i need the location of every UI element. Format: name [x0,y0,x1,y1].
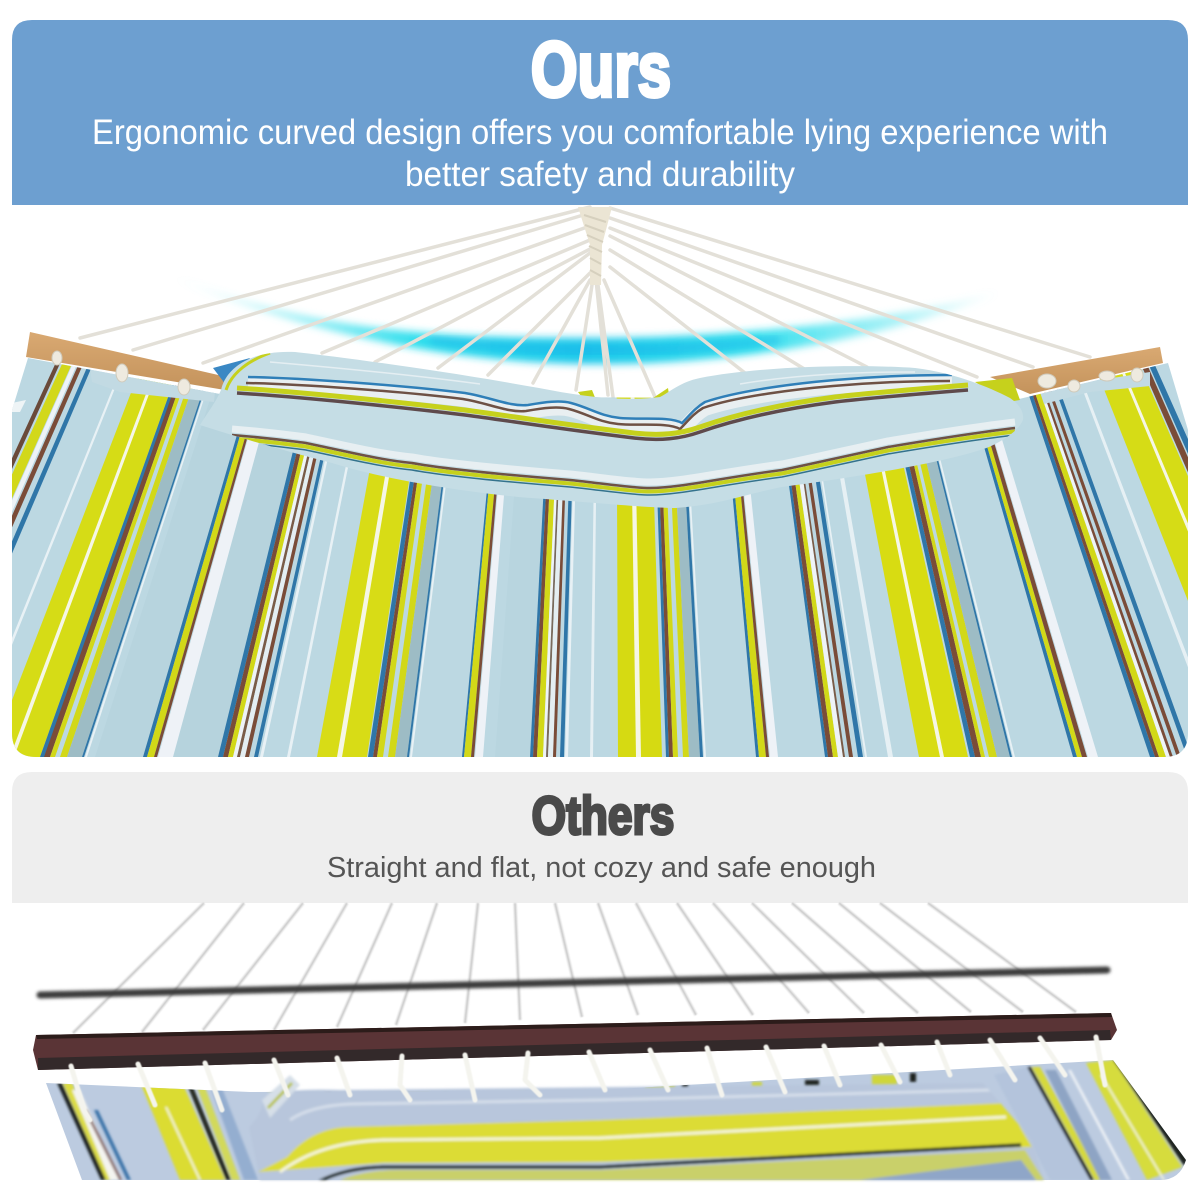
header background [12,20,1188,205]
lower pillow [249,1075,1044,1182]
pillow pale lower strip [340,1150,1044,1180]
rope knots on bars [52,351,1143,395]
text: ours description [92,113,1108,194]
panel: ours header [12,20,1188,205]
top edge tabs [267,1092,272,1093]
flat brown spreader bar [33,1013,1117,1070]
pillow back tufts [213,358,250,385]
rope knot [578,207,612,285]
straight reference line [40,970,1107,995]
right wooden spreader bar [990,347,1163,394]
pillow [200,352,1023,508]
fabric hems under bars [90,368,215,402]
text: ours description: Ergonomic curved design offers you comfortable lying experience with [92,113,1108,152]
photo: flat hammock [33,903,1188,1182]
hammock fabric stripes [12,358,1188,757]
heading: Ours: Ours [531,25,671,113]
pillow lower yellow band [232,432,1015,492]
far left [12,364,60,469]
right fabric stripes [994,1067,1090,1180]
heading: Others: Others [532,786,674,846]
pillow dark band [237,390,968,439]
others background [12,772,1188,903]
text: others description: Straight and flat, not cozy and safe enough [327,852,876,884]
pillow body [200,352,1023,508]
pillow brown line [246,381,950,429]
pillow lower blue band [232,435,1015,495]
pillow white stripe [280,1117,1006,1172]
pillow yellow band [258,1103,1032,1172]
curved highlight arc [170,276,1000,364]
suspension ropes [80,207,1090,397]
pillow yellow band [237,385,968,434]
pillow lower white band [232,422,1015,482]
pillow blue line [248,375,952,423]
panel: others header [12,772,1188,903]
subtle shading [213,392,219,394]
pillow lower brown band [232,428,1015,488]
left wooden spreader bar [26,332,227,390]
left fabric stripes [57,1083,106,1180]
pillow seam highlights [270,362,915,384]
photo: curved hammock [12,205,1188,757]
pillow yellow fold left [226,353,270,390]
lower hammock fabric [46,1059,1188,1180]
hanging loops [71,1037,1105,1120]
pillow highlight [290,1090,990,1120]
text: ours description: better safety and durability [405,155,795,194]
pillow dark stripe [318,1145,1021,1182]
pillow upper white band [248,382,952,430]
flat ropes [73,903,1076,1033]
